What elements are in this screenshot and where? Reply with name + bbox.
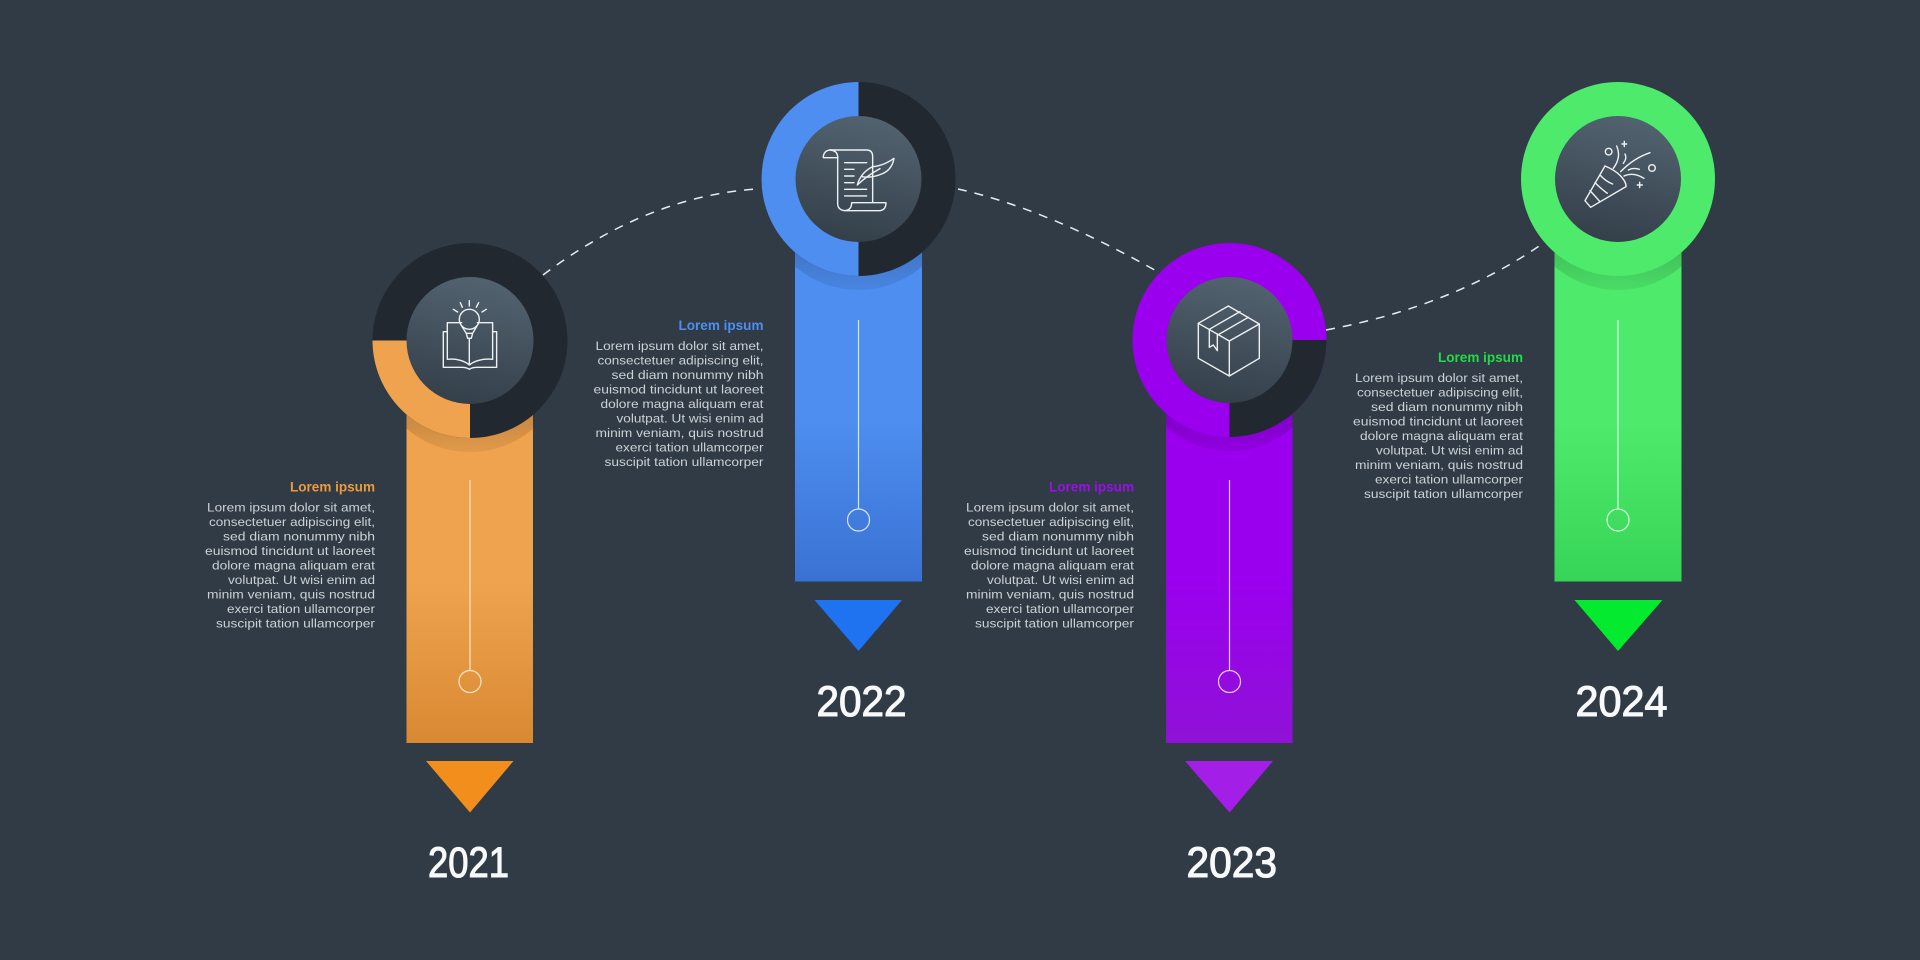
body text: suscipit tation ullamcorper (975, 616, 1134, 630)
body text: sed diam nonummy nibh (612, 368, 764, 382)
body text: suscipit tation ullamcorper (604, 455, 764, 469)
body text: volutpat. Ut wisi enim ad (1376, 443, 1523, 457)
ring (762, 82, 956, 276)
body text: exerci tation ullamcorper (986, 602, 1134, 616)
year: 2022 (816, 678, 906, 726)
inner disc (796, 116, 922, 242)
column: 2021 orange (372, 243, 568, 887)
body text (205, 501, 376, 630)
body text: euismod tincidunt ut laoreet (1353, 414, 1524, 428)
body text: sed diam nonummy nibh (1371, 400, 1523, 414)
ring shadow (1554, 252, 1682, 290)
vertical line with marker (459, 480, 481, 692)
body text: Lorem ipsum dolor sit amet, (596, 339, 764, 353)
body text: sed diam nonummy nibh (982, 530, 1134, 544)
body text: consectetuer adipiscing elit, (598, 354, 764, 368)
bar (795, 179, 922, 582)
body text (594, 339, 764, 469)
bar (1166, 340, 1292, 743)
ring (372, 243, 568, 438)
body text: exerci tation ullamcorper (616, 440, 764, 454)
body text: exerci tation ullamcorper (227, 602, 375, 616)
body text: consectetuer adipiscing elit, (1357, 386, 1523, 400)
text block: 2022 (594, 318, 764, 469)
body text: euismod tincidunt ut laoreet (594, 382, 764, 396)
body text: dolore magna aliquam erat (971, 558, 1135, 572)
body text: minim veniam, quis nostrud (207, 587, 375, 601)
icon: package box (1198, 306, 1259, 376)
body text: volutpat. Ut wisi enim ad (228, 573, 375, 587)
bar (1554, 179, 1682, 582)
body text: Lorem ipsum dolor sit amet, (207, 501, 375, 515)
column: 2022 blue (762, 82, 956, 726)
body text: Lorem ipsum dolor sit amet, (1355, 371, 1523, 385)
body text (964, 501, 1135, 630)
body text: suscipit tation ullamcorper (1364, 487, 1523, 501)
year: 2023 (1186, 839, 1277, 887)
triangle pointer (1574, 600, 1662, 651)
ring shadow (1166, 414, 1292, 451)
body text: Lorem ipsum dolor sit amet, (966, 501, 1134, 515)
body text: consectetuer adipiscing elit, (209, 515, 375, 529)
body text (1353, 371, 1524, 501)
ring shadow (406, 414, 533, 452)
body text: consectetuer adipiscing elit, (968, 515, 1134, 529)
body text: sed diam nonummy nibh (223, 530, 375, 544)
triangle pointer (1185, 761, 1273, 812)
triangle pointer (814, 600, 902, 651)
infographic canvas (206, 82, 1715, 878)
year: 2021 (428, 839, 509, 887)
body text: suscipit tation ullamcorper (216, 616, 375, 630)
column: 2023 purple (1132, 243, 1326, 887)
heading: Lorem ipsum (1438, 350, 1523, 366)
heading: Lorem ipsum (678, 318, 764, 334)
column: 2024 green (1521, 82, 1715, 726)
text block: 2024 (1353, 350, 1524, 501)
heading: Lorem ipsum (1049, 480, 1134, 496)
heading: Lorem ipsum (290, 480, 375, 496)
body text: exerci tation ullamcorper (1375, 472, 1523, 486)
vertical line with marker (1607, 320, 1629, 531)
body text: minim veniam, quis nostrud (1355, 458, 1523, 472)
dashed connector lines (543, 189, 1545, 330)
vertical line with marker (1218, 480, 1240, 692)
inner disc (1555, 116, 1681, 242)
ring shadow (795, 252, 922, 290)
year: 2024 (1576, 678, 1668, 726)
ring (1132, 243, 1326, 437)
body text: dolore magna aliquam erat (1360, 429, 1524, 443)
icon: scroll and quill (823, 150, 894, 211)
text block: 2023 (964, 480, 1135, 630)
body text: volutpat. Ut wisi enim ad (616, 411, 764, 425)
body text: dolore magna aliquam erat (600, 397, 764, 411)
body text: dolore magna aliquam erat (212, 558, 376, 572)
icon: book with lightbulb (443, 301, 497, 369)
inner disc (406, 277, 534, 404)
bar (406, 340, 533, 743)
triangle pointer (426, 761, 514, 812)
body text: euismod tincidunt ut laoreet (964, 544, 1135, 558)
inner disc (1166, 277, 1292, 403)
ring (1521, 82, 1715, 276)
body text: euismod tincidunt ut laoreet (205, 544, 376, 558)
body text: minim veniam, quis nostrud (966, 587, 1134, 601)
body text: minim veniam, quis nostrud (596, 426, 764, 440)
vertical line with marker (848, 320, 870, 531)
text block: 2021 (205, 480, 376, 630)
icon: party popper (1585, 141, 1655, 207)
body text: volutpat. Ut wisi enim ad (987, 573, 1134, 587)
